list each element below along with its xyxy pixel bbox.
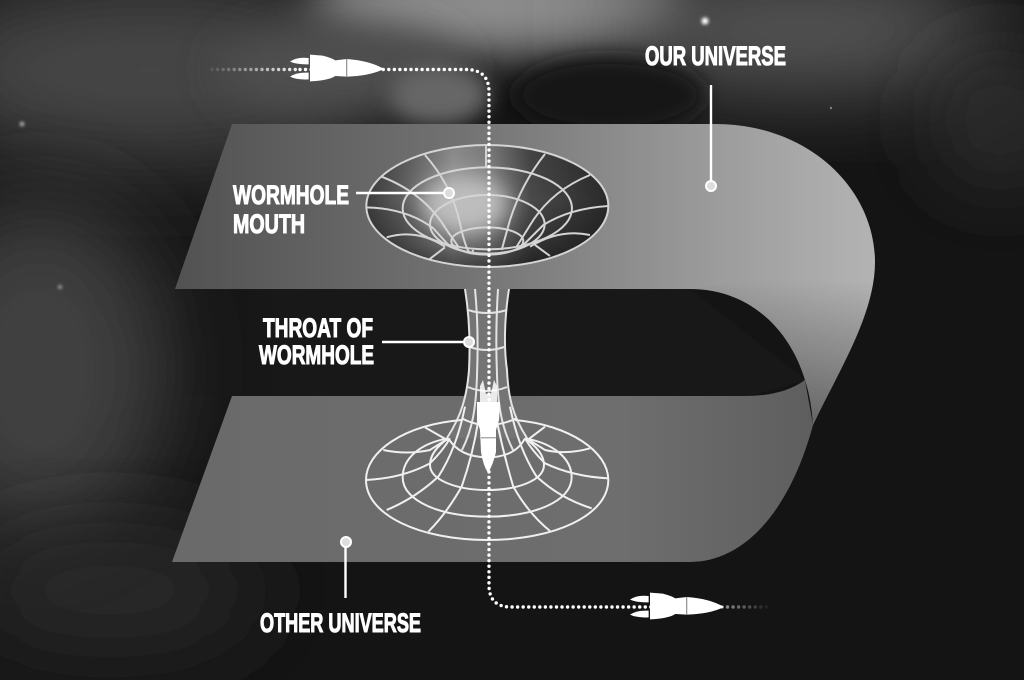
- label: throat of wormhole: WORMHOLE: [259, 340, 374, 370]
- panel: dark space between universes: [170, 289, 805, 396]
- label: throat of wormhole: THROAT OF: [263, 313, 373, 343]
- leader: our universe: [706, 85, 716, 191]
- leader: wormhole mouth: [356, 188, 454, 198]
- leader: throat: [382, 337, 474, 347]
- label: wormhole mouth: WORMHOLE: [233, 180, 349, 210]
- stars: [20, 18, 832, 289]
- label: wormhole mouth: [233, 180, 349, 239]
- label: wormhole mouth: MOUTH: [233, 209, 305, 239]
- throat of wormhole: [447, 289, 527, 450]
- label: throat of wormhole: [259, 313, 374, 370]
- panel: our universe sheet: [175, 124, 875, 425]
- rocket: throat: [477, 380, 500, 473]
- rocket: top: [290, 55, 384, 81]
- leader: other universe: [341, 537, 351, 598]
- wormhole mouth funnel: [366, 145, 608, 267]
- label: other universe: OTHER UNIVERSE: [260, 608, 421, 638]
- panel: other universe sheet: [172, 380, 813, 562]
- lower wormhole funnel: [366, 407, 608, 540]
- rocket: bottom: [630, 593, 724, 619]
- label: our universe: OUR UNIVERSE: [645, 41, 786, 71]
- dotted flight path: [212, 70, 772, 607]
